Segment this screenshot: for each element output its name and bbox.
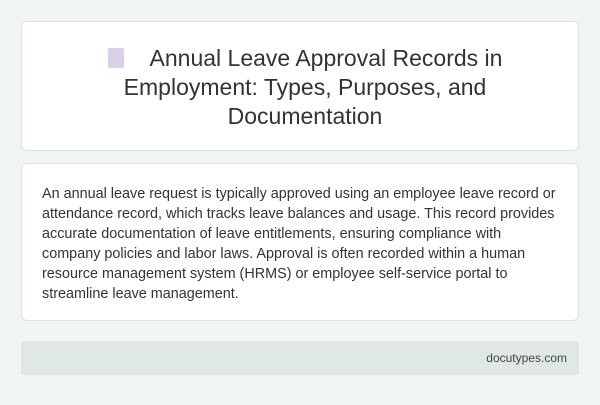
description panel xyxy=(21,163,579,321)
footer xyxy=(21,341,579,375)
description text: An annual leave request is typically approved using an employee leave record or attendance record, which tracks leave balances and usage. This record provides accurate documentation of leave entitlements, ensuring compliance with company policies and labor laws. Approval is often recorded within a human resource management system (HRMS) or employee self-service portal to streamline leave management. xyxy=(42,186,556,302)
icon: document xyxy=(108,48,124,68)
footer text: docutypes.com xyxy=(486,351,567,365)
title panel xyxy=(21,21,579,151)
title: Annual Leave Approval Records in Employment: Types, Purposes, and Documentation xyxy=(124,45,502,129)
